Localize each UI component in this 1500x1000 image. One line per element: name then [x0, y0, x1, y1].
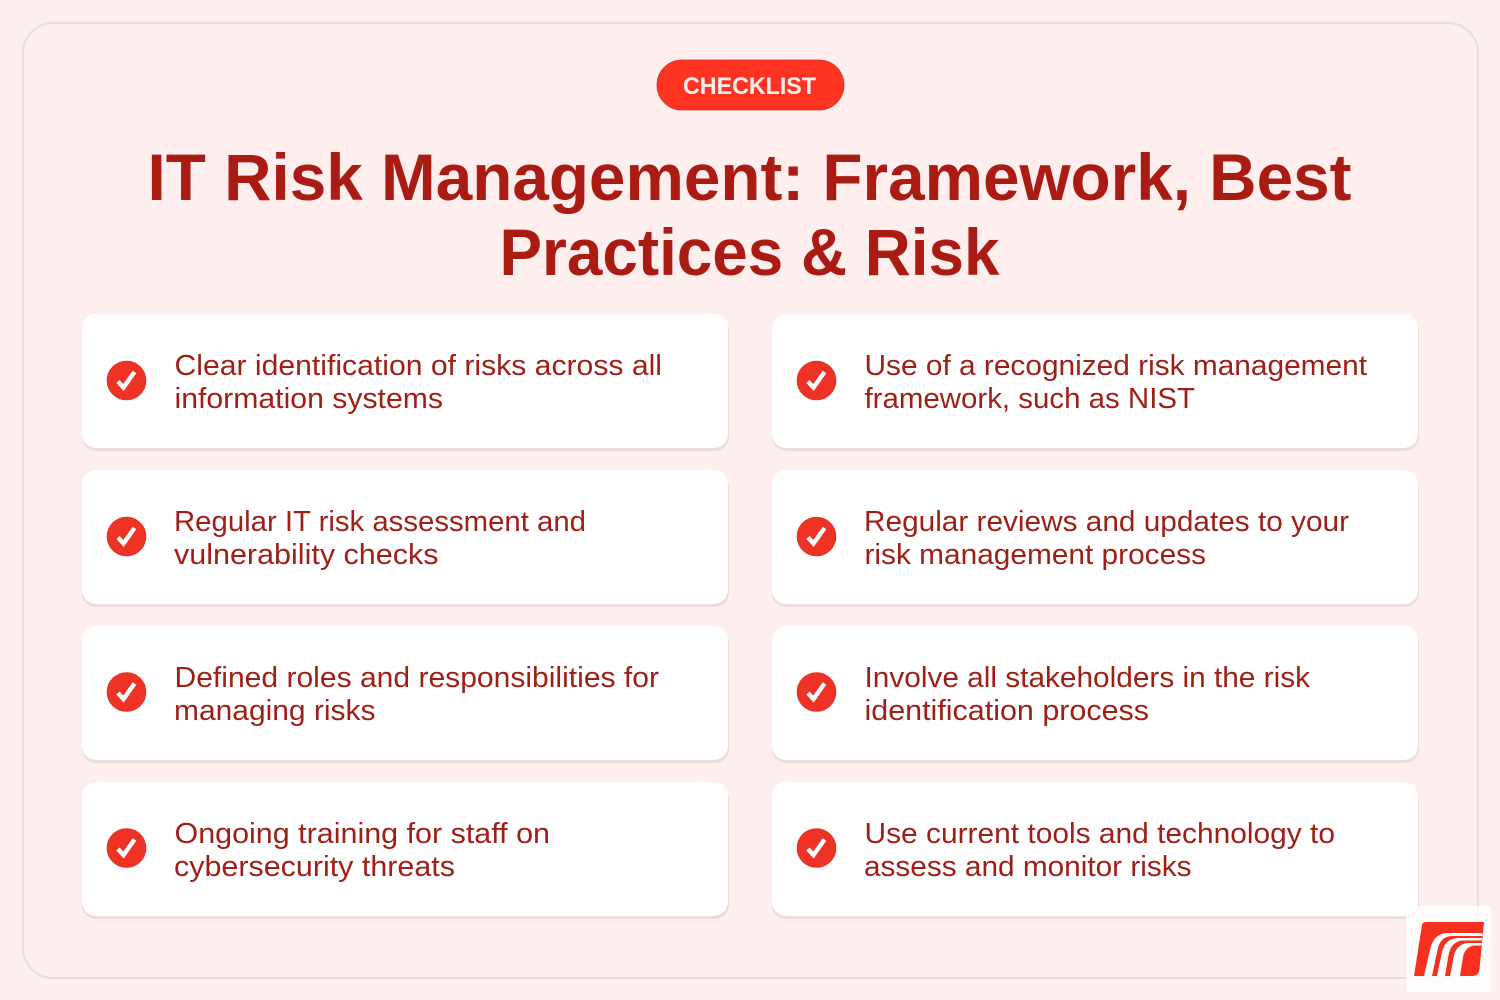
card: defined roles: Defined roles and responsibilities for: [174, 662, 660, 694]
card: recognized framework: framework, such as NIST: [864, 383, 1195, 415]
card: recognized framework: [772, 314, 1419, 451]
card: ongoing training: [82, 782, 729, 919]
title: IT Risk Management: Framework, Best: [148, 140, 1352, 214]
badge: checklist: CHECKLIST: [683, 73, 816, 100]
card: clear identification of risks: [82, 314, 729, 451]
card: defined roles: [82, 626, 729, 763]
card: clear identification of risks: information systems: [174, 383, 443, 415]
title: [148, 140, 1352, 289]
card: clear identification of risks: Clear identification of risks across all: [174, 350, 662, 382]
card: regular reviews: [772, 470, 1419, 607]
card: regular risk assessment: [82, 470, 729, 607]
card: defined roles: managing risks: [174, 695, 376, 727]
card: regular risk assessment: Regular IT risk assessment and: [174, 506, 586, 538]
card: ongoing training: cybersecurity threats: [174, 851, 455, 883]
title: Practices & Risk: [500, 215, 1000, 289]
card: current tools: assess and monitor risks: [864, 851, 1192, 883]
logo: [1406, 906, 1491, 992]
card: regular reviews: Regular reviews and updates to your: [864, 506, 1350, 538]
card: current tools: Use current tools and technology to: [864, 818, 1335, 850]
card: involve stakeholders: Involve all stakeholders in the risk: [864, 662, 1311, 694]
badge: checklist: [657, 60, 844, 110]
card: regular risk assessment: vulnerability checks: [174, 539, 438, 571]
card: ongoing training: Ongoing training for staff on: [174, 818, 550, 850]
card: involve stakeholders: identification process: [864, 695, 1149, 727]
card: current tools: [772, 782, 1419, 919]
card: involve stakeholders: [772, 626, 1419, 763]
card: regular reviews: risk management process: [864, 539, 1206, 571]
card: recognized framework: Use of a recognized risk management: [864, 350, 1367, 382]
